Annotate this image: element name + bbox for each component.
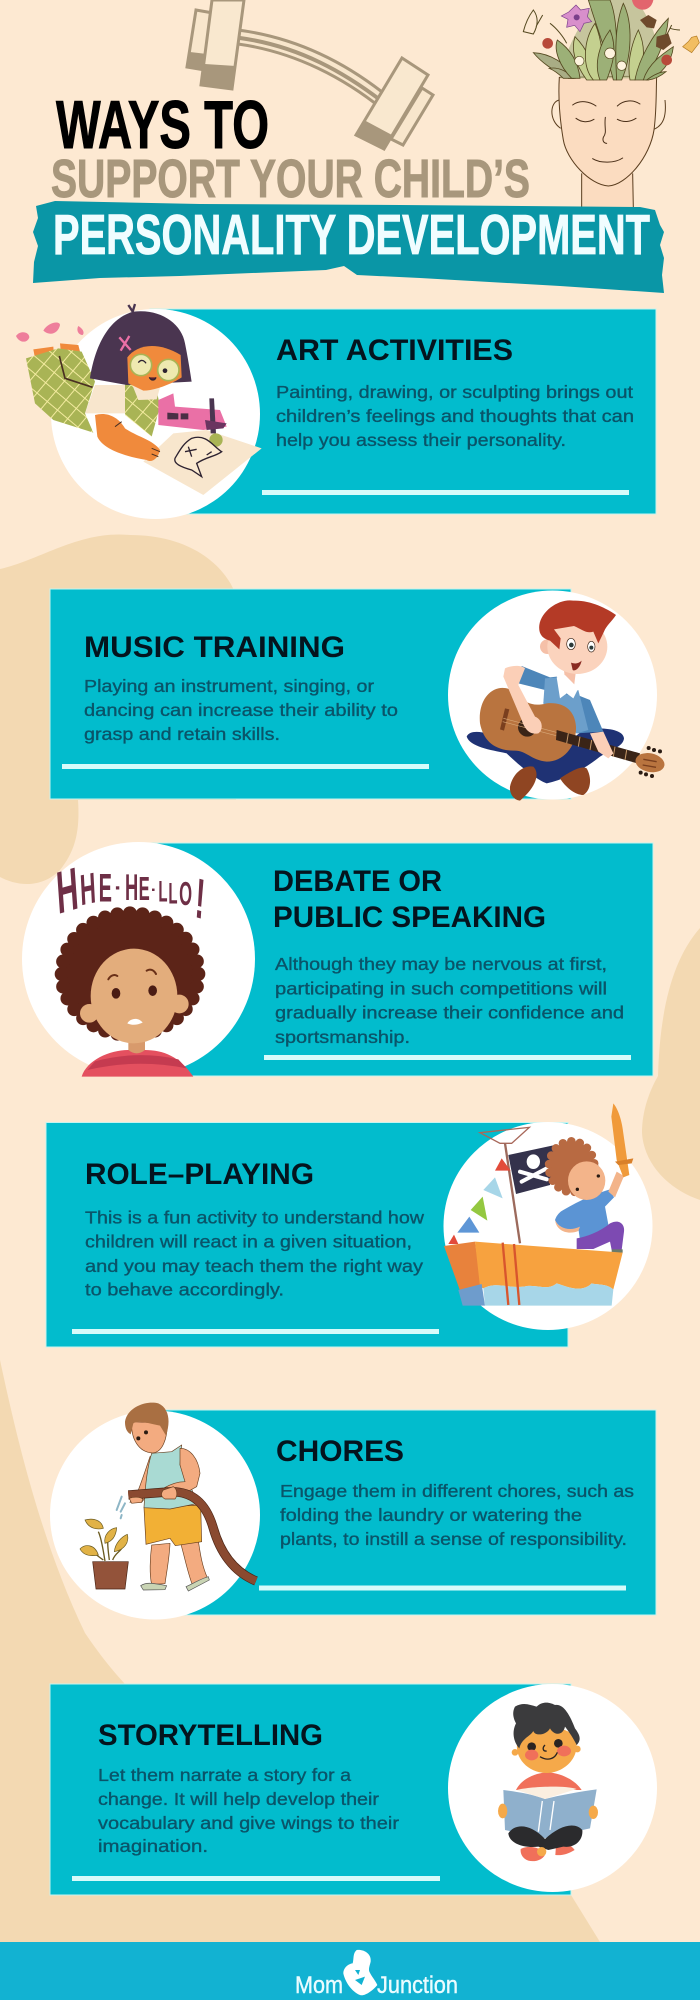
text block: music training: Playing an instrument, singing, or	[84, 676, 374, 696]
speech lettering: E	[99, 865, 112, 911]
heading: music training: MUSIC TRAINING	[84, 631, 345, 664]
icon: barbell	[187, 0, 433, 149]
text block: music training	[84, 676, 398, 744]
speech lettering: L	[168, 878, 177, 911]
text block: music training: grasp and retain skills.	[84, 724, 280, 744]
heading: ways to: WAYS TO	[56, 87, 269, 163]
text block: debate: gradually increase their confidence and	[275, 1002, 624, 1022]
text block: art activities	[276, 382, 634, 450]
panel: art activities	[16, 304, 656, 519]
text block: storytelling: imagination.	[98, 1836, 208, 1856]
text block: storytelling: Let them narrate a story for a	[98, 1765, 351, 1785]
heading: debate or public speaking	[273, 865, 546, 934]
text block: chores	[280, 1481, 634, 1549]
text block: storytelling	[98, 1765, 399, 1856]
heading: art activities: ART ACTIVITIES	[276, 334, 513, 367]
logo mark	[343, 1950, 377, 1995]
text block: art activities: children’s feelings and thoughts that can	[276, 406, 634, 426]
logo wordmark: Junction	[377, 1972, 458, 1999]
speech lettering: O	[179, 875, 192, 913]
speech lettering: !	[193, 867, 207, 932]
speech lettering: -	[152, 879, 155, 900]
text block: debate	[275, 954, 624, 1047]
illustration: boy with guitar	[467, 600, 666, 801]
text block: role-playing: and you may teach them the right way	[85, 1256, 423, 1276]
speech lettering: E	[139, 870, 150, 908]
speech lettering: H	[125, 868, 138, 909]
background blob: right	[642, 928, 700, 1200]
speech lettering: H	[54, 855, 80, 928]
text block: chores: folding the laundry or watering the	[280, 1505, 582, 1525]
illustration: boy watering plant	[80, 1403, 256, 1591]
text block: storytelling: vocabulary and give wings to their	[98, 1813, 399, 1833]
text block: storytelling: change. It will help develop their	[98, 1789, 379, 1809]
heading: debate or public speaking: PUBLIC SPEAKING	[273, 901, 546, 934]
text block: chores: Engage them in different chores, such as	[280, 1481, 634, 1501]
footer band	[0, 1942, 700, 2000]
speech lettering: L	[158, 876, 167, 909]
heading banner	[33, 201, 664, 293]
illustration: nervous child saying hello	[54, 855, 207, 1077]
text block: role-playing: This is a fun activity to understand how	[85, 1208, 424, 1228]
panel: debate or public speaking	[22, 842, 653, 1077]
heading: support your child's: SUPPORT YOUR CHILD’S	[51, 149, 530, 209]
text block: role-playing	[85, 1208, 424, 1300]
illustration: girl drawing	[16, 304, 262, 495]
heading: debate or public speaking: DEBATE OR	[273, 865, 442, 898]
logo wordmark: Mom	[295, 1972, 343, 1999]
speech lettering: -	[115, 872, 120, 901]
heading: chores: CHORES	[276, 1435, 404, 1468]
text block: role-playing: to behave accordingly.	[85, 1280, 284, 1300]
text block: art activities: help you assess their personality.	[276, 430, 566, 450]
text block: debate: sportsmanship.	[275, 1027, 410, 1047]
text block: chores: plants, to instill a sense of responsibility.	[280, 1529, 627, 1549]
panel: role-playing	[46, 1103, 652, 1347]
text block: music training: dancing can increase their ability to	[84, 700, 398, 720]
panel: chores	[50, 1403, 656, 1620]
icon: head with flowers	[523, 0, 699, 208]
heading: role-playing: ROLE–PLAYING	[85, 1158, 314, 1191]
background shape: lower left	[0, 1360, 600, 1942]
panel: storytelling	[50, 1684, 657, 1895]
panel: music training	[50, 589, 666, 801]
background blob: upper left	[0, 534, 236, 884]
text block: debate: Although they may be nervous at first,	[275, 954, 607, 974]
text block: debate: participating in such competitions will	[275, 978, 607, 998]
illustration: pirate ship boy	[444, 1103, 633, 1306]
text block: art activities: Painting, drawing, or sculpting brings out	[276, 382, 633, 402]
speech lettering: H	[79, 864, 97, 915]
text block: role-playing: children will react in a given situation,	[85, 1232, 412, 1252]
illustration: child reading book	[498, 1703, 598, 1861]
heading: storytelling: STORYTELLING	[98, 1719, 323, 1752]
